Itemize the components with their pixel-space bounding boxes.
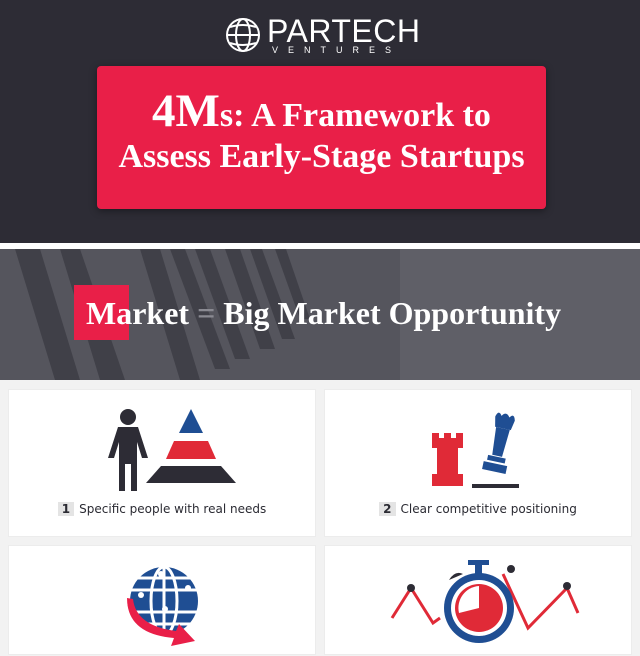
title box: 4Ms: A Framework to (152, 85, 491, 137)
caption: Clear competitive positioning (401, 502, 577, 516)
card 2 (324, 389, 632, 537)
caption: 2 (383, 502, 392, 516)
icon: globe (226, 18, 260, 52)
logo (226, 13, 420, 55)
section heading: Market = Big Market Opportunity (86, 295, 561, 331)
icon: globe with arrow (127, 567, 198, 646)
photo band: market heading (0, 249, 640, 380)
card 3 (8, 545, 316, 655)
card 1 (8, 389, 316, 537)
logo: VENTURES (272, 45, 401, 55)
card 4 (324, 545, 632, 655)
header background (0, 0, 640, 243)
title box (97, 66, 546, 209)
icon: chess pieces (432, 412, 519, 488)
icon: stopwatch and chart (390, 560, 580, 643)
red box (74, 285, 129, 340)
white stripe (0, 243, 640, 249)
title box: Assess Early-Stage Startups (118, 138, 525, 175)
logo text: PARTECH (267, 13, 420, 49)
caption: Specific people with real needs (79, 502, 266, 516)
icon: person and pyramid (108, 409, 236, 491)
caption: 1 (62, 502, 70, 516)
